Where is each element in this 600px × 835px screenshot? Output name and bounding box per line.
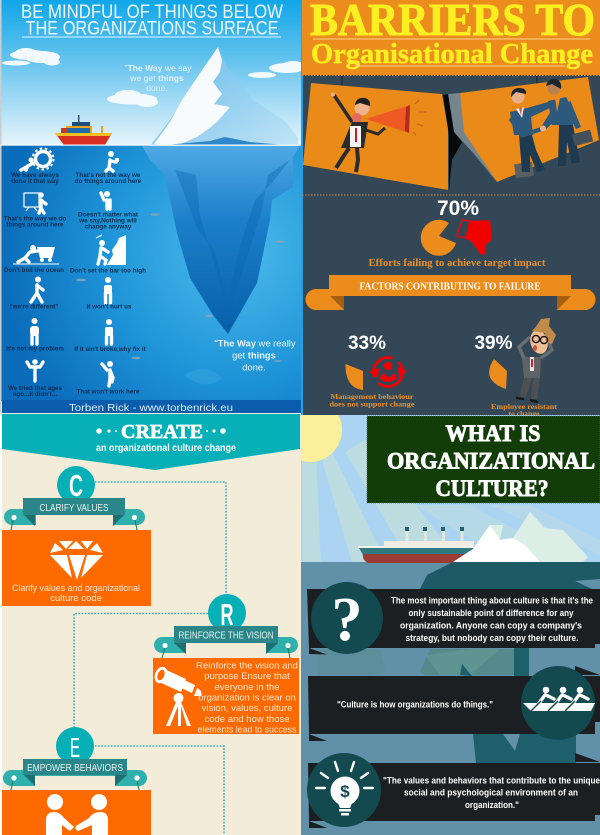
text: only sustainable point of difference for any <box>408 608 574 619</box>
statistic 70%: 70% <box>437 197 479 220</box>
label: do things around here <box>75 178 142 185</box>
label: Don't boil the ocean <box>4 267 64 274</box>
quote above water <box>124 63 192 93</box>
card text: Clarify values and organizational <box>12 583 140 594</box>
banner 2 <box>308 666 600 741</box>
title: an organizational culture change <box>96 442 236 454</box>
caption: Employee resistant <box>491 402 557 411</box>
title: BE MINDFUL OF THINGS BELOW <box>21 2 283 23</box>
submerged iceberg <box>420 562 600 590</box>
icon: question mark: ? <box>332 586 362 654</box>
iceberg <box>453 512 588 562</box>
icon: management cycle <box>369 358 407 386</box>
icon: two businessmen shaking hands <box>509 79 593 178</box>
icon: light bulb with dollar <box>307 753 381 827</box>
ribbon: empower behaviors <box>3 759 147 790</box>
card text: code and how those <box>204 714 290 725</box>
caption: to change <box>508 409 540 418</box>
icon: man arm raised <box>101 191 110 209</box>
icon: diamond <box>50 541 103 580</box>
quote below water: get things <box>232 350 276 360</box>
statistic 33%: 33% <box>348 333 386 354</box>
crack <box>443 93 497 190</box>
icon: miner with cart <box>13 245 59 264</box>
fish <box>76 213 284 384</box>
sea <box>301 562 600 835</box>
label: Don't set the bar too high <box>70 268 146 274</box>
ribbon: clarify values: CLARIFY VALUES <box>40 503 109 514</box>
icon: worried man <box>516 318 556 402</box>
title <box>310 0 595 70</box>
dotted connectors <box>74 482 226 835</box>
icon: man shrugging <box>27 359 43 381</box>
card text: culture code <box>50 593 102 604</box>
panel: iceberg <box>0 0 305 414</box>
submerged iceberg <box>142 146 300 334</box>
caption: Management behaviour <box>330 392 414 401</box>
ribbon: empower behaviors: EMPOWER BEHAVIORS <box>27 763 123 774</box>
ribbon banner <box>306 275 596 310</box>
badge C <box>57 466 95 504</box>
badge C: C <box>69 468 83 503</box>
title box <box>367 416 600 503</box>
quote above water: done. <box>146 83 168 93</box>
label: change anyway <box>85 224 132 230</box>
label: "we're different" <box>10 304 58 310</box>
title <box>96 421 236 454</box>
label: That's the way we do <box>4 216 67 222</box>
icon: man with cup <box>106 151 119 171</box>
title: Organisational Change <box>311 38 593 70</box>
title <box>21 2 283 40</box>
text: organization. Anyone can copy a company's <box>400 620 582 632</box>
label: That's not the way we <box>76 172 141 179</box>
iceberg tip <box>150 47 298 146</box>
caption: does not support change <box>330 400 415 408</box>
panel: what is organizational culture <box>301 415 600 835</box>
icon: light bulb with dollar: $ <box>340 782 350 801</box>
label: We tried that ages <box>8 385 63 392</box>
icon: man with megaphone <box>331 92 427 172</box>
badge E: E <box>70 732 80 763</box>
label: things around here <box>6 222 64 228</box>
left poster <box>303 76 449 190</box>
ribbon: clarify values <box>4 498 145 530</box>
orange card <box>2 530 151 606</box>
ribbon: reinforce the vision: REINFORCE THE VISION <box>178 630 274 642</box>
badge R <box>208 594 246 632</box>
quote: social and psychological environment of an <box>404 788 578 798</box>
orange header <box>302 0 600 75</box>
quote: "Culture is how organizations do things." <box>337 700 493 710</box>
dotted divider <box>302 76 600 195</box>
label: We have always <box>11 172 59 179</box>
icon: question mark <box>311 582 383 654</box>
quote below water: done. <box>242 362 266 372</box>
ship <box>358 527 474 563</box>
label: That won't work here <box>77 388 140 396</box>
pie chart 70% <box>421 220 456 256</box>
statistic 39%: 39% <box>474 333 513 354</box>
right poster <box>460 76 599 182</box>
card text: everyone in the <box>215 682 279 693</box>
sun rays <box>302 440 600 562</box>
banner 1 <box>307 582 600 654</box>
title box: CULTURE? <box>436 476 548 501</box>
quote below water <box>214 338 296 372</box>
quote below water: "The Way we really <box>214 338 296 348</box>
title box: ORGANIZATIONAL <box>387 448 595 474</box>
icon: standing man hands on hips <box>105 319 113 344</box>
ribbon: reinforce the vision <box>154 626 298 658</box>
orange card <box>2 790 151 835</box>
title: CREATE <box>121 421 203 443</box>
quote <box>383 776 600 811</box>
title: THE ORGANIZATIONS SURFACE <box>26 18 278 40</box>
icon: gear and man <box>21 148 54 170</box>
panel: create culture change <box>0 413 301 835</box>
title box: WHAT IS <box>446 421 540 446</box>
waterline <box>0 144 301 146</box>
panel: barriers to change <box>301 0 600 418</box>
card text: elements lead to success <box>198 724 297 736</box>
footer band: Torben Rick - www.torbenrick.eu <box>69 402 233 414</box>
submerged shapes <box>317 645 576 763</box>
label: we say,Nothing will <box>78 218 137 224</box>
text <box>391 596 593 644</box>
icon: telescope <box>152 665 202 726</box>
card text: vision, values, culture <box>202 703 292 714</box>
icon: standing man hands down <box>30 318 39 344</box>
clouds <box>2 48 305 107</box>
badge R: R <box>220 597 234 632</box>
dark background <box>301 0 600 415</box>
card text <box>196 660 298 736</box>
quote: organization." <box>465 800 519 811</box>
icon: thumbs down <box>457 220 492 255</box>
teal header <box>2 414 300 470</box>
card text: organization is clear on <box>198 692 296 704</box>
step C <box>2 466 151 606</box>
sun <box>301 415 342 462</box>
ribbon banner: FACTORS CONTRIBUTING TO FAILURE <box>360 282 540 292</box>
orange card <box>153 658 299 734</box>
icon: handshake <box>46 794 108 835</box>
pie chart 39% <box>489 359 507 389</box>
pie chart 33% <box>345 364 363 390</box>
quote above water: "The Way we say <box>124 63 192 73</box>
icon: walking man <box>31 276 43 302</box>
footer band <box>2 400 301 414</box>
step R <box>152 594 299 736</box>
icon: rowers <box>521 666 595 740</box>
icon: presenter <box>24 192 46 213</box>
step E <box>2 727 151 835</box>
icon: climber and cliff <box>96 235 126 265</box>
card text: purpose Ensure that <box>204 671 290 682</box>
beige background <box>0 413 301 835</box>
icon: standing man arms crossed <box>104 277 112 303</box>
red ship <box>55 115 112 145</box>
badge E <box>56 727 94 765</box>
sea <box>0 145 301 401</box>
card text: Reinforce the vision and <box>196 660 298 672</box>
caption: Efforts failing to achieve target impact <box>368 258 546 269</box>
sky <box>0 0 301 146</box>
label: It's not my problem <box>6 346 64 352</box>
label: If it ain't broke,why fix it <box>74 346 147 353</box>
label: done it that way <box>11 178 59 185</box>
label: It won't hurt us <box>87 304 132 310</box>
label: ago...it didn't... <box>13 391 57 398</box>
quote above water: we get things <box>129 73 184 83</box>
banner 3 <box>307 753 600 828</box>
text: strategy, but nobody can copy their culture. <box>406 633 578 644</box>
card text <box>12 583 140 604</box>
sky <box>301 415 600 565</box>
label: Doesn't matter what <box>78 212 139 218</box>
icon: man hand raised <box>102 361 113 386</box>
